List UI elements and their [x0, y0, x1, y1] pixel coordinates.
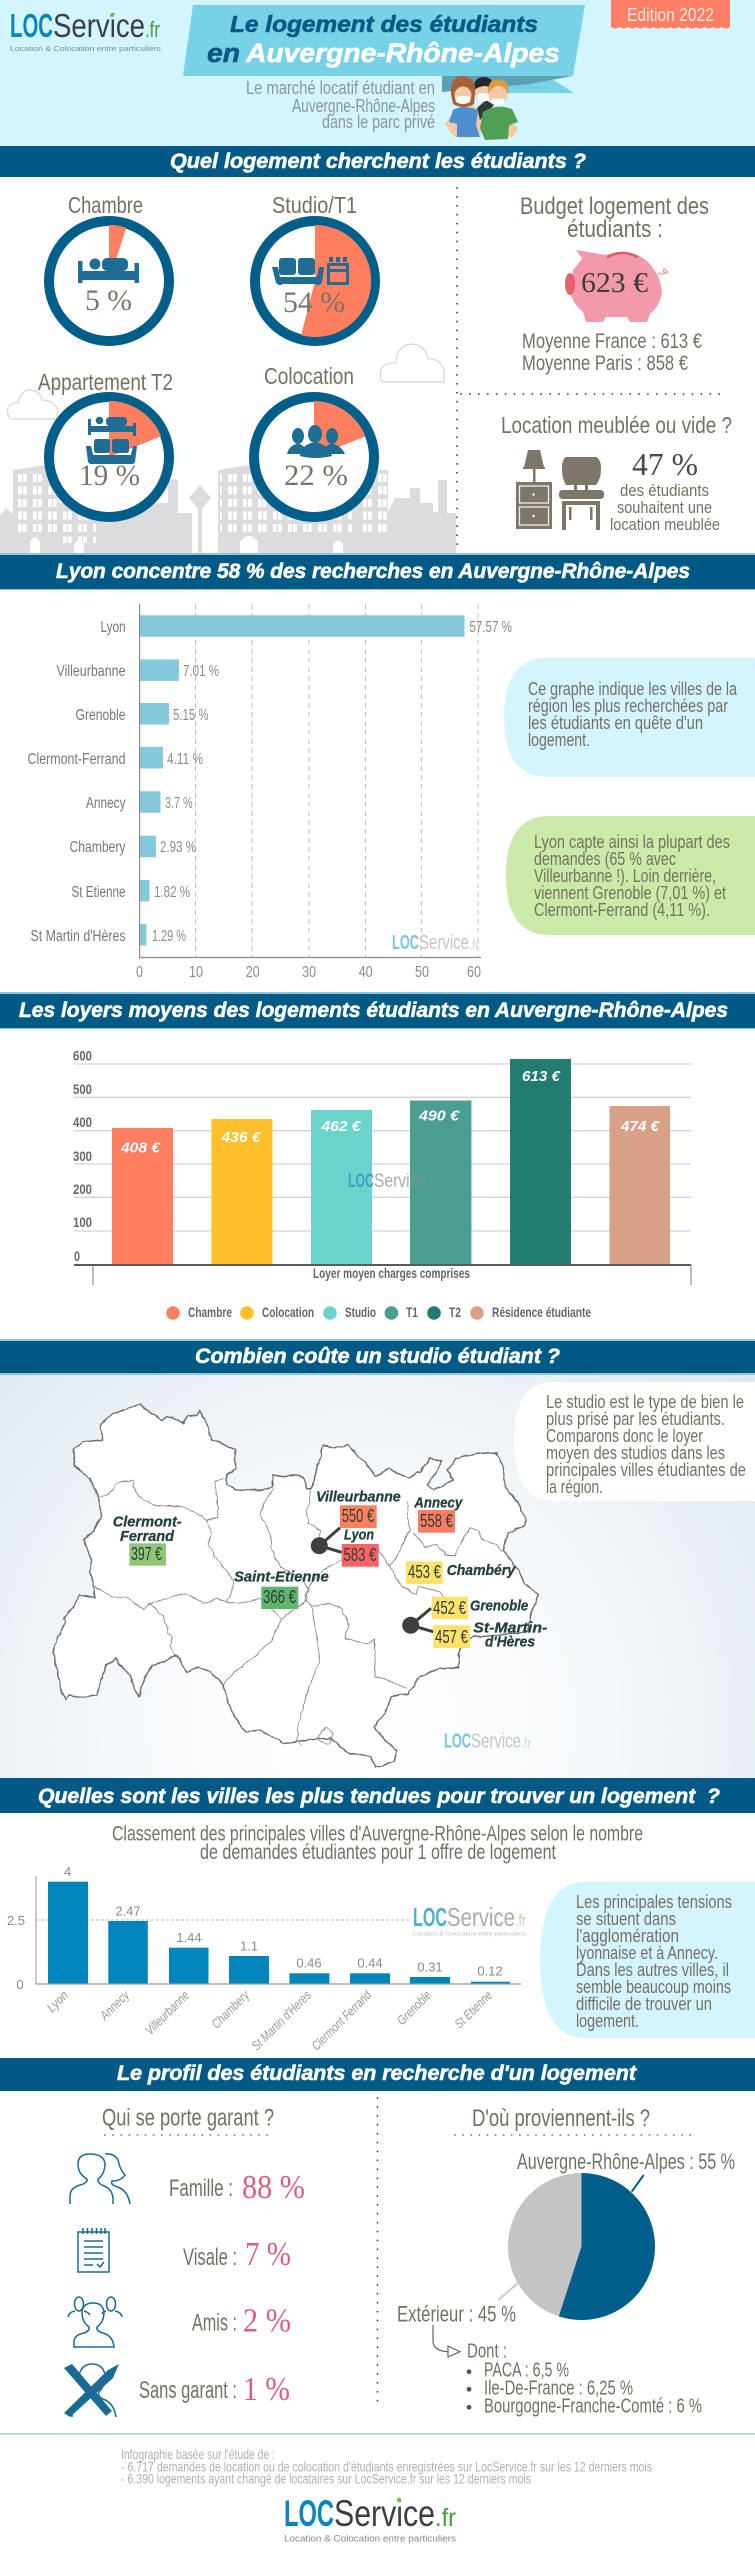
department borders west: [95, 1478, 320, 1685]
heading bar: quel logement: [0, 146, 755, 177]
St-Martin-d'Hères: [433, 1619, 547, 1651]
map background: [0, 1373, 755, 1778]
watermark: .fr: [469, 936, 479, 952]
panel: garant: [64, 2105, 305, 2417]
heading bar: loyers moyens: Les loyers moyens des logements étudiants en Auvergne-Rhône-Alpes: [19, 999, 728, 1022]
bar chart: tension: 4: [64, 1864, 71, 1879]
chambre: 5 %: [85, 284, 132, 317]
panel: budget: [520, 193, 709, 375]
callout: Lyon capte: [506, 816, 755, 935]
logo: LOCService: Location & Colocation entre particuliers: [10, 44, 161, 53]
bar chart: villes recherchées: 1.82 %: [154, 884, 190, 901]
bar chart: loyers: 0: [74, 1249, 80, 1264]
legend: Résidence étudiante: [492, 1304, 591, 1320]
Lyon: [342, 1526, 379, 1567]
callout: graphe: les étudiants en quête d'un: [528, 713, 703, 733]
heading bar: Lyon concentre: Lyon concentre 58 % des recherches en Auvergne-Rhône-Alpes: [56, 560, 690, 583]
bar chart: villes recherchées: 60: [467, 964, 481, 981]
bar chart: villes recherchées: 30: [302, 964, 316, 981]
panel: meublée ou vide: des étudiants: [620, 481, 709, 500]
cloud left: [7, 390, 58, 419]
panel: garant: 7 %: [245, 2236, 291, 2273]
heading bar: villes tendues: Quelles sont les villes les plus tendues pour trouver un logement ?: [38, 1785, 720, 1808]
studio: 54 %: [283, 286, 345, 319]
callout: studio: [514, 1382, 755, 1501]
chambre: Chambre: [68, 192, 143, 218]
icon: family: [70, 2154, 130, 2204]
watermark: .fr: [521, 1734, 531, 1750]
callout: tensions: se situent dans: [576, 1909, 676, 1929]
chart title: de demandes étudiantes pour 1 offre de logement: [200, 1841, 556, 1864]
dotted dividers profile: [105, 2098, 690, 2407]
bar chart: villes recherchées: Annecy: [86, 795, 126, 812]
bar chart: villes recherchées: 2.93 %: [160, 839, 196, 856]
bar chart: villes recherchées: 10: [189, 964, 203, 981]
bar chart: tension: Villeurbanne: [142, 1988, 192, 2038]
edition tag: [611, 0, 730, 28]
panel: provenance: D'où proviennent-ils ?: [472, 2105, 650, 2132]
footer logo: Location & Colocation entre particuliers: [284, 2534, 456, 2545]
panel: budget: 623 €: [581, 267, 649, 299]
watermark: .fr: [515, 1911, 526, 1930]
bar chart: loyers: 400: [73, 1115, 92, 1130]
Annecy: 558 €: [420, 1511, 453, 1531]
icon: lamp and nightstand: [516, 450, 552, 529]
bar chart: loyers: 490 €: [418, 1108, 460, 1125]
panel: garant: 88 %: [242, 2169, 305, 2206]
icon: document: [78, 2228, 109, 2272]
St-Martin-d'Hères: 457 €: [435, 1627, 468, 1647]
Clermont-Ferrand: 397 €: [131, 1544, 162, 1564]
bar chart: villes recherchées: Clermont-Ferrand: [28, 751, 126, 768]
bar chart: tension: 2.5: [7, 1913, 25, 1928]
edition tag: Edition 2022: [627, 5, 714, 25]
bar chart: villes recherchées: 4.11 %: [167, 751, 203, 768]
bar chart: tension: St Etienne: [451, 1988, 495, 2031]
panel: meublée ou vide: location meublée: [610, 515, 720, 534]
Villeurbanne: Villeurbanne: [316, 1488, 401, 1505]
list: [467, 2360, 702, 2418]
heading bar: Lyon concentre: [0, 553, 755, 590]
ribbon tail: [442, 76, 574, 93]
city skyline: [0, 465, 456, 553]
colocation: 22 %: [284, 459, 348, 492]
bar chart: tension: Clermont Ferrand: [308, 1987, 375, 2053]
bar chart: loyers: 462 €: [320, 1118, 361, 1135]
bar chart: villes recherchées: 7.01 %: [183, 663, 219, 680]
panel: provenance: Dont :: [467, 2341, 507, 2363]
appartement T2: 19 %: [79, 459, 140, 492]
Chambéry: 453 €: [408, 1562, 441, 1582]
studio: [255, 192, 375, 341]
callout: Lyon capte: Clermont-Ferrand (4,11 %).: [534, 900, 710, 920]
icon: friends: [68, 2297, 122, 2347]
panel: budget: Moyenne Paris : 858 €: [522, 352, 688, 375]
appartement T2: [38, 369, 173, 517]
panel: meublée ou vide: souhaitent une: [617, 498, 712, 517]
title: Le logement des étudiants: [230, 11, 538, 37]
footer logo: LOC: [284, 2493, 334, 2534]
Chambéry: Chambéry: [447, 1562, 516, 1579]
colocation: Colocation: [264, 363, 354, 389]
appartement T2: Appartement T2: [38, 369, 173, 395]
footer logo: [284, 2493, 456, 2545]
callout: tensions: l'agglomération: [576, 1926, 679, 1946]
watermark: [348, 1171, 426, 1192]
title: Auvergne-Rhône-Alpes: [245, 38, 560, 68]
logo: LOCService: [10, 7, 161, 53]
subtitle: dans le parc privé: [322, 112, 435, 132]
bar chart: villes recherchées: St Etienne: [72, 884, 126, 901]
chambre: [49, 192, 169, 341]
bar chart: villes recherchées: 0: [136, 964, 143, 981]
bar chart: tension: 0.44: [357, 1955, 383, 1970]
heading bar: profil: [0, 2058, 755, 2091]
Clermont-Ferrand: Clermont-: [113, 1514, 182, 1531]
dotted dividers: [457, 188, 722, 552]
bar chart: loyers: 613 €: [522, 1068, 561, 1085]
bar chart: tension: Lyon: [44, 1988, 71, 2015]
cloud right: [380, 344, 444, 382]
callout: graphe: [504, 658, 755, 777]
bar chart: loyers: 500: [73, 1082, 92, 1097]
legend: T1: [406, 1304, 418, 1320]
logo: LOCService: Service: [53, 7, 145, 44]
Annecy: [413, 1494, 463, 1533]
bar chart: villes recherchées: 1.29 %: [152, 928, 186, 945]
Lyon: Lyon: [344, 1526, 374, 1543]
bar chart: tension: 1.44: [176, 1930, 202, 1945]
Saint-Etienne: Saint-Etienne: [234, 1569, 329, 1586]
bar chart: villes recherchées: Grenoble: [76, 707, 126, 724]
panel: garant: Sans garant :: [139, 2377, 237, 2404]
logo: LOCService: .fr: [145, 17, 160, 42]
bar chart: villes recherchées: 40: [359, 964, 373, 981]
bar chart: villes recherchées: 50: [415, 964, 429, 981]
footer source text: Infographie basée sur l'étude de :: [121, 2446, 275, 2462]
bar chart: tension: 0.31: [417, 1959, 443, 1974]
subtitle: Auvergne-Rhône-Alpes: [292, 96, 435, 116]
bar chart: tension: Annecy: [96, 1987, 133, 2023]
callout: tensions: lyonnaise et à Annecy.: [576, 1943, 718, 1963]
St-Martin-d'Hères: d'Hères: [485, 1634, 535, 1651]
watermark: [392, 932, 479, 954]
Clermont-Ferrand: Ferrand: [120, 1528, 175, 1545]
bar chart: tension: 0.46: [296, 1955, 322, 1970]
chart title: [112, 1823, 643, 1864]
footer logo: Service: [334, 2493, 435, 2534]
arrow: [433, 2325, 460, 2357]
bar chart: villes recherchées: Villeurbanne: [56, 663, 126, 680]
bar chart: loyers: Loyer moyen charges comprises: [313, 1266, 470, 1281]
panel: garant: Amis :: [192, 2310, 237, 2337]
list: PACA : 6,5 %: [484, 2360, 569, 2382]
legend: Colocation: [262, 1304, 314, 1320]
panel: provenance: Extérieur : 45 %: [397, 2302, 516, 2327]
bar chart: villes recherchées: Lyon: [100, 619, 126, 636]
bar chart: tension: 2.47: [115, 1904, 141, 1919]
subtitle: [246, 78, 435, 132]
Saint-Etienne: [234, 1569, 329, 1609]
watermark: Location & Colocation entre particuliers: [413, 1932, 526, 1938]
legend: [166, 1304, 591, 1320]
callout: studio: la région.: [546, 1477, 603, 1497]
bar chart: villes recherchées: [28, 604, 512, 981]
illustration: three students: [445, 76, 518, 140]
watermark: [413, 1902, 526, 1938]
bar chart: loyers: 200: [73, 1182, 92, 1197]
panel: garant: Visale :: [183, 2244, 237, 2271]
bar chart: villes recherchées: St Martin d'Hères: [30, 928, 126, 945]
bar chart: tension: [7, 1864, 526, 2053]
heading bar: loyers moyens: [0, 992, 755, 1029]
callout: Lyon capte: demandes (65 % avec: [534, 849, 676, 869]
watermark: Service: [447, 1902, 515, 1932]
ribbon banner: [183, 5, 585, 76]
heading bar: studio: [0, 1339, 755, 1375]
icon: group of people: [287, 425, 345, 458]
panel: garant: Qui se porte garant ?: [102, 2105, 274, 2132]
watermark: LOC: [444, 1730, 471, 1752]
bar chart: loyers: 474 €: [620, 1118, 660, 1135]
bar chart: loyers: 408 €: [120, 1140, 161, 1157]
legend: Chambre: [188, 1304, 232, 1320]
panel: budget: Moyenne France : 613 €: [522, 330, 702, 353]
Annecy: Annecy: [413, 1494, 463, 1511]
bar chart: loyers: [73, 1049, 691, 1320]
Grenoble: 452 €: [433, 1598, 466, 1618]
header: [0, 0, 755, 147]
Lyon: 583 €: [344, 1545, 376, 1565]
watermark: Service: [374, 1171, 426, 1192]
colocation: [254, 363, 374, 517]
icon: chair: [559, 457, 604, 530]
bar chart: tension: Grenoble: [394, 1988, 434, 2028]
bar chart: villes recherchées: 3.7 %: [165, 795, 193, 812]
footer logo: .fr: [435, 2504, 456, 2532]
icon: bed and sofa: [86, 417, 137, 464]
panel: garant: 1 %: [243, 2371, 290, 2408]
Saint-Etienne: 366 €: [263, 1587, 296, 1607]
St-Martin-d'Hères: St-Martin-: [473, 1619, 547, 1636]
region outline: [53, 1404, 538, 1767]
watermark: [444, 1730, 531, 1752]
legend: T2: [449, 1304, 461, 1320]
callout: tensions: difficile de trouver un: [576, 1994, 712, 2014]
Grenoble: Grenoble: [470, 1598, 528, 1615]
footer source text: - 6.390 logements ayant changé de locataires sur LocService.fr sur les 12 derniers mois: [121, 2471, 531, 2487]
heading bar: profil: Le profil des étudiants en recherche d'un logement: [117, 2062, 637, 2085]
title: [207, 11, 560, 68]
list: Ile-De-France : 6,25 %: [484, 2378, 633, 2400]
bar chart: tension: 0.12: [477, 1964, 503, 1979]
pie chart: [498, 2173, 655, 2320]
panel: budget: Budget logement des: [520, 193, 709, 220]
Grenoble: [432, 1597, 528, 1619]
footer rule: [0, 2433, 755, 2435]
bar chart: loyers: 600: [73, 1049, 92, 1064]
bar chart: tension: St Martin d'Heres: [248, 1987, 314, 2053]
pin connectors: [311, 1528, 433, 1634]
Villeurbanne: 550 €: [342, 1506, 374, 1526]
bar chart: tension: Chambery: [208, 1987, 253, 2031]
bar chart: loyers: 100: [73, 1215, 92, 1230]
bar chart: tension: 0: [16, 1977, 24, 1992]
Clermont-Ferrand: [113, 1514, 182, 1566]
bar chart: loyers: 436 €: [220, 1129, 261, 1146]
watermark: LOC: [348, 1171, 374, 1192]
panel: budget: étudiants :: [567, 216, 663, 243]
bar chart: villes recherchées: 5.15 %: [173, 707, 209, 724]
icon: no guarantor: [64, 2364, 119, 2417]
panel: meublée ou vide: 47 %: [632, 446, 698, 482]
watermark: Service: [419, 932, 469, 954]
callout: graphe: logement.: [528, 730, 590, 750]
watermark: LOC: [392, 932, 419, 954]
callout: tensions: logement.: [576, 2011, 639, 2031]
panel: types de logement: [0, 192, 456, 553]
map pins and prices: [113, 1488, 547, 1752]
icon: piggy bank: [565, 250, 668, 322]
Chambéry: [406, 1561, 516, 1584]
icon: sofa and stove: [272, 257, 349, 285]
panel: meublée ou vide: [501, 412, 732, 534]
callout: tensions: [540, 1882, 755, 2038]
heading bar: quel logement: Quel logement cherchent les étudiants ?: [170, 150, 586, 173]
bar chart: villes recherchées: 57.57 %: [469, 619, 512, 636]
map: Auvergne-Rhône-Alpes: [53, 1404, 538, 1767]
subtitle: Le marché locatif étudiant en: [246, 78, 435, 98]
watermark: LOC: [413, 1902, 447, 1932]
heading bar: studio: Combien coûte un studio étudiant ?: [195, 1345, 560, 1368]
department borders east: [297, 1502, 502, 1745]
icon: bed: [78, 258, 139, 283]
bar chart: loyers: 300: [73, 1149, 92, 1164]
bar chart: tension: 1.1: [240, 1939, 258, 1954]
title: en: [207, 38, 240, 68]
panel: garant: 2 %: [243, 2303, 291, 2340]
heading bar: villes tendues: [0, 1778, 755, 1813]
panel: provenance: [397, 2105, 735, 2418]
watermark: Service: [471, 1730, 521, 1752]
studio: Studio/T1: [272, 192, 357, 218]
panel: garant: Famille :: [169, 2175, 233, 2202]
legend: Studio: [345, 1304, 376, 1320]
footer source text: [121, 2446, 652, 2487]
bar chart: villes recherchées: Chambery: [70, 839, 126, 856]
callout: studio: Comparons donc le loyer: [546, 1426, 703, 1446]
Villeurbanne: [316, 1488, 401, 1528]
logo: LOCService: LOC: [10, 7, 53, 44]
bar chart: villes recherchées: 20: [246, 964, 260, 981]
